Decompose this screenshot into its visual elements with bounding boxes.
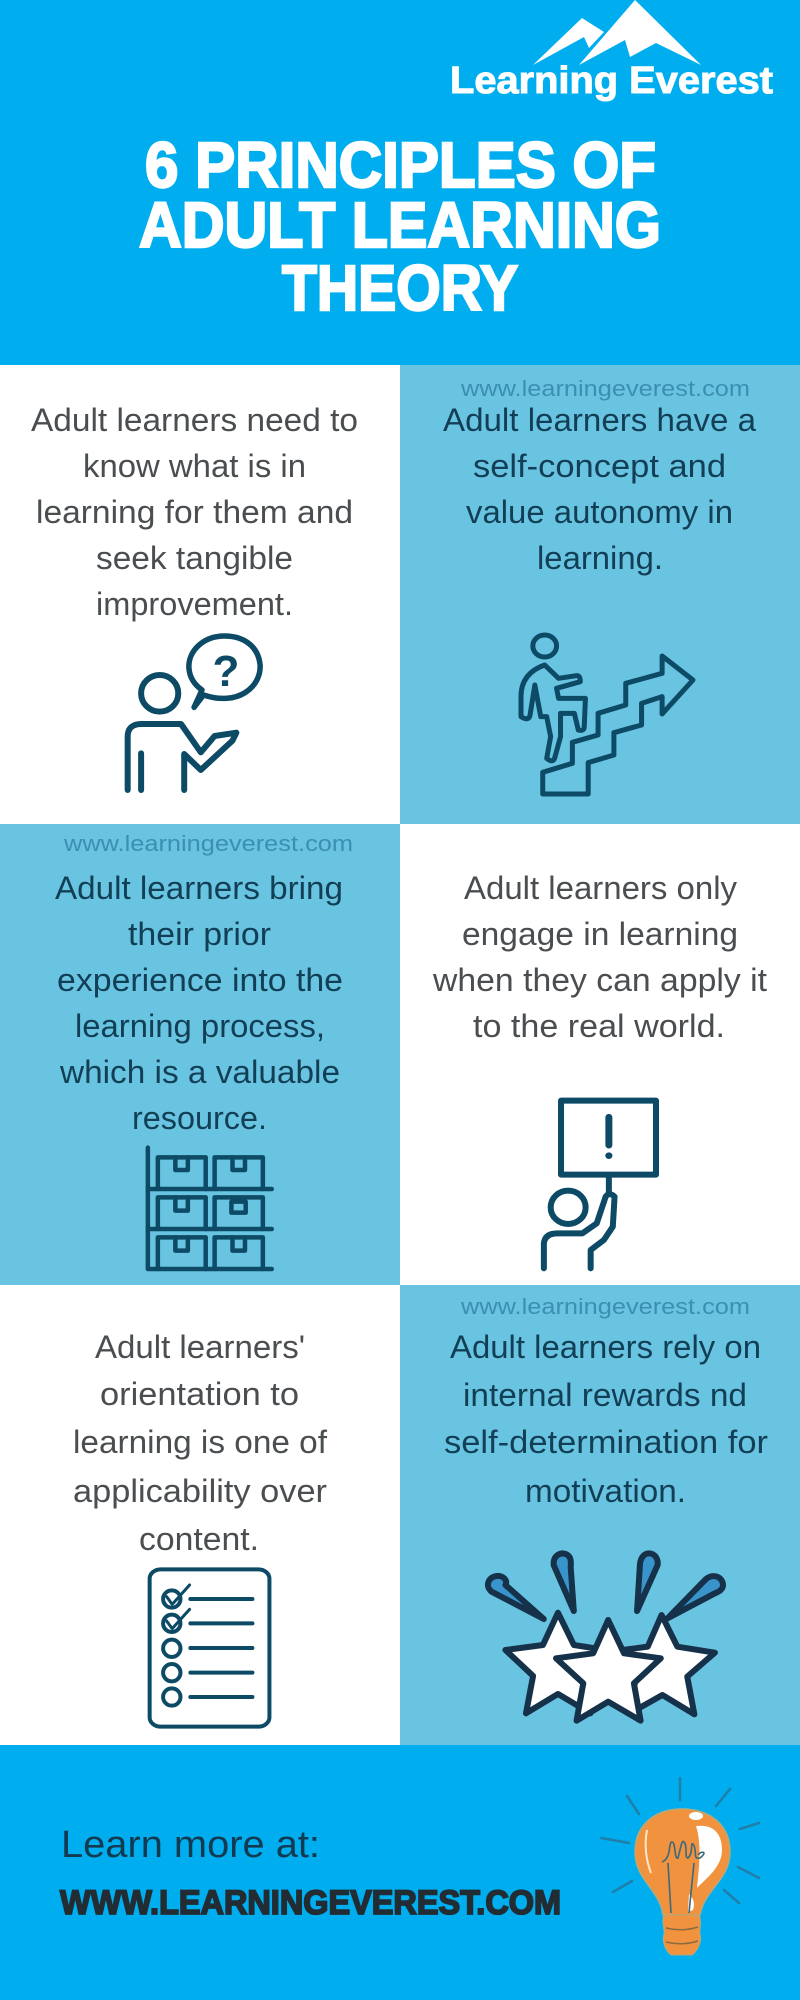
text: need to know: learning for them and xyxy=(36,494,353,530)
title: 6 PRINCIPLES OF xyxy=(145,129,656,201)
panel: prior experience xyxy=(0,824,400,1285)
text: real world: to the real world. xyxy=(473,1008,725,1044)
icon: person with question bubble: ? xyxy=(213,647,239,696)
text: motivation xyxy=(444,1329,768,1509)
text: motivation: internal rewards nd xyxy=(463,1377,747,1413)
text: need to know: improvement. xyxy=(96,586,293,622)
text: motivation: motivation. xyxy=(525,1473,686,1509)
text: applicability: learning is one of xyxy=(73,1424,327,1460)
footer band xyxy=(0,1745,800,2000)
text: applicability xyxy=(73,1329,327,1557)
text: motivation: self-determination for xyxy=(444,1424,768,1460)
logo: Learning Everest xyxy=(450,0,773,102)
text: prior experience: experience into the xyxy=(57,962,343,998)
watermark url: www.learningeverest.com xyxy=(63,831,353,856)
watermark url: www.learningeverest.com xyxy=(460,376,750,401)
footer label: Learn more at: xyxy=(61,1824,320,1866)
text: prior experience: which is a valuable xyxy=(59,1054,340,1090)
logo: Learning Everest: Learning Everest xyxy=(450,60,773,102)
icon: checklist xyxy=(150,1569,269,1727)
watermark url: www.learningeverest.com xyxy=(460,1294,750,1319)
text: need to know: know what is in xyxy=(83,448,306,484)
text: real world: Adult learners only xyxy=(464,870,737,906)
text: applicability: content. xyxy=(139,1521,259,1557)
text: self-concept: learning. xyxy=(537,540,663,576)
header band xyxy=(0,0,800,365)
text: applicability: orientation to xyxy=(100,1376,299,1412)
title: ADULT LEARNING xyxy=(139,189,661,261)
text: prior experience xyxy=(55,870,343,1136)
footer url: WWW.LEARNINGEVEREST.COM xyxy=(60,1884,561,1922)
text: motivation: Adult learners rely on xyxy=(450,1329,761,1365)
icon: person with question bubble xyxy=(128,636,260,790)
text: self-concept: Adult learners have a xyxy=(443,402,756,438)
icon: person climbing stairs xyxy=(521,635,693,794)
icon: light bulb xyxy=(601,1778,759,1955)
icon: person holding exclamation sign xyxy=(544,1101,656,1268)
text: prior experience: learning process, xyxy=(75,1008,325,1044)
text: self-concept xyxy=(443,402,756,576)
text: self-concept: self-concept and xyxy=(473,448,726,484)
panel: real world xyxy=(400,824,800,1285)
icon: three stars xyxy=(488,1553,723,1721)
text: self-concept: value autonomy in xyxy=(466,494,733,530)
text: need to know: seek tangible xyxy=(96,540,293,576)
title: THEORY xyxy=(282,252,518,324)
text: real world: when they can apply it xyxy=(432,962,767,998)
text: applicability: Adult learners' xyxy=(95,1329,305,1365)
title xyxy=(139,129,661,324)
text: prior experience: resource. xyxy=(132,1100,267,1136)
panel: applicability xyxy=(0,1285,400,1745)
text: need to know xyxy=(31,402,358,622)
panel: motivation xyxy=(400,1285,800,1745)
panel: need to know xyxy=(0,365,400,824)
icon: shelves with boxes xyxy=(148,1148,272,1269)
text: prior experience: their prior xyxy=(128,916,271,952)
text: need to know: Adult learners need to xyxy=(31,402,358,438)
text: real world xyxy=(432,870,767,1044)
text: prior experience: Adult learners bring xyxy=(55,870,343,906)
panel: self-concept xyxy=(400,365,800,824)
text: real world: engage in learning xyxy=(462,916,738,952)
text: applicability: applicability over xyxy=(73,1473,327,1509)
